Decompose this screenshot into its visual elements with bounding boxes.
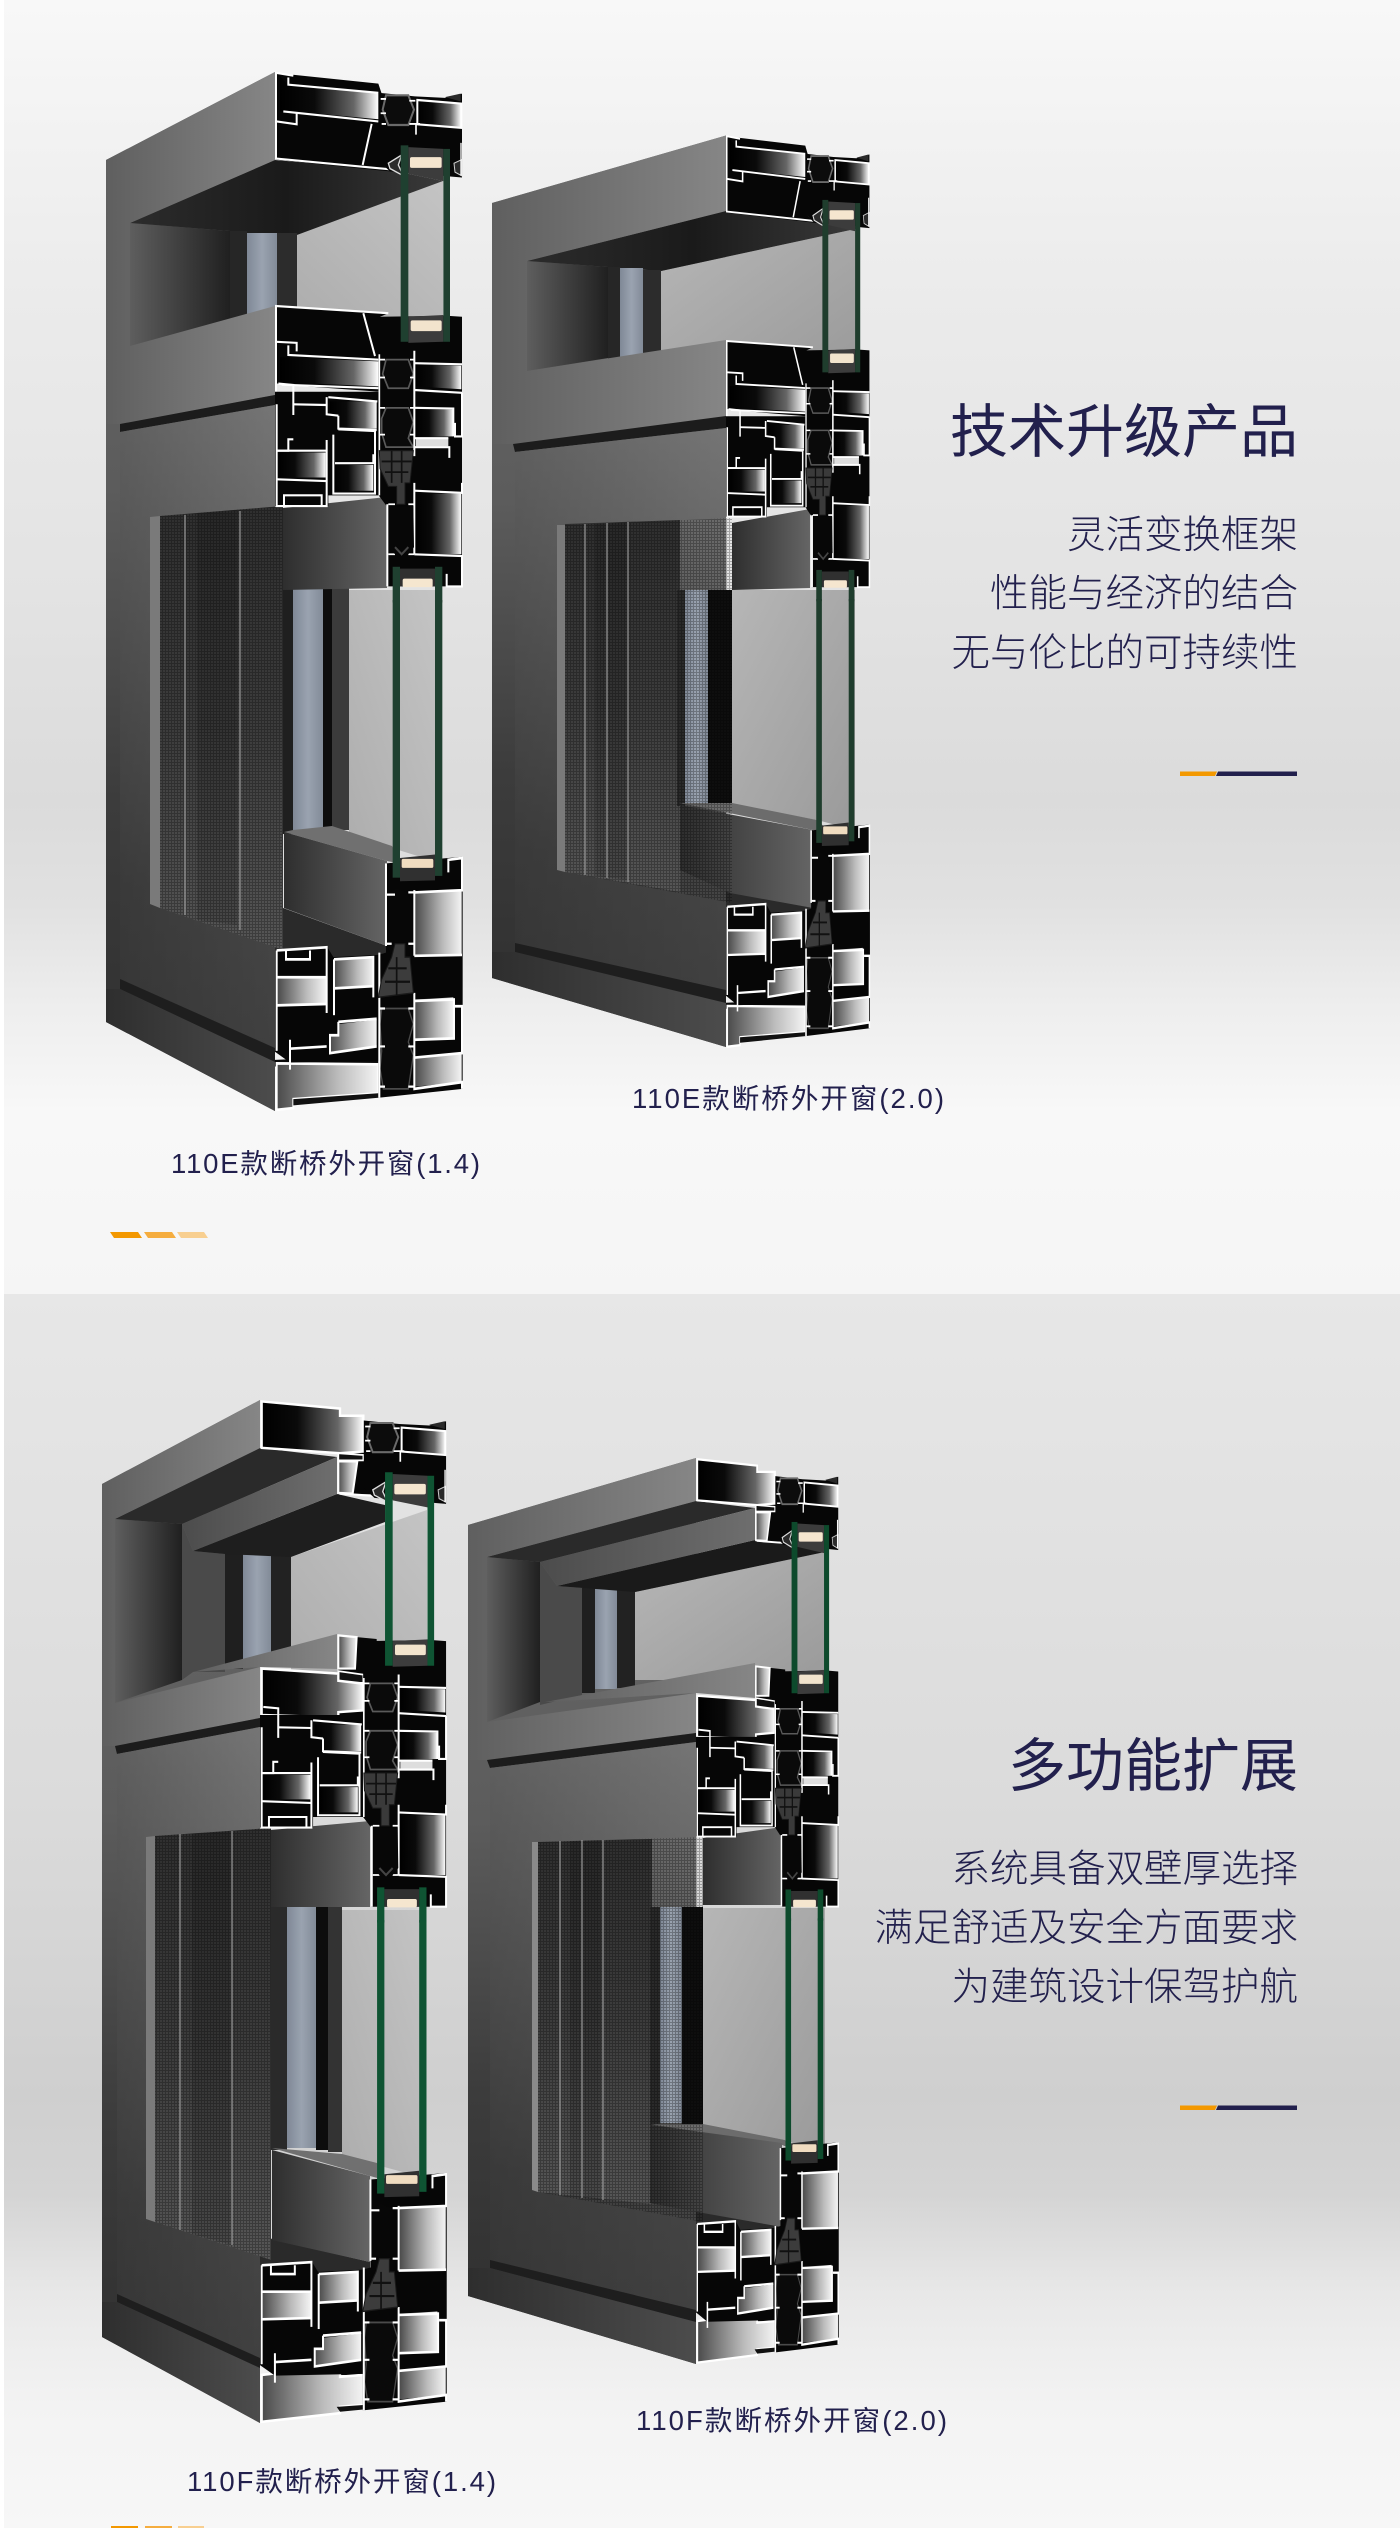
section: F profile [696,1459,839,2363]
glass panes [393,145,450,881]
screen mesh [532,1837,703,2222]
heading: technology upgrade: 技术升级产品 [950,400,1298,465]
upper opening [527,211,860,371]
text block: multifunction features: 满足舒适及安全方面要求 [874,1907,1298,1950]
screen mesh [557,518,732,903]
decorative tabs: top [110,1232,208,1238]
glass panes [377,1472,434,2197]
text block: technology upgrade features: 灵活变换框架 [1067,514,1298,557]
face bands [492,136,726,444]
accent rule: top [1180,772,1297,776]
lower opening [260,1821,425,2290]
caption: 110E 1.4: 110E款断桥外开窗(1.4) [171,1148,480,1179]
glass panes [816,200,860,846]
text block: multifunction features: 为建筑设计保驾护航 [951,1966,1298,2009]
screen mesh [146,1828,271,2260]
panel: top background [4,0,1400,1294]
accent rule: bottom [1180,2106,1297,2110]
face bands [468,1458,696,1760]
window model: 110F 2.0 [468,1458,839,2364]
window model: 110F 1.4 [102,1400,447,2423]
text block: multifunction features [874,1848,1298,2009]
text block: technology upgrade features: 无与伦比的可持续性 [951,632,1298,675]
face bands [106,72,275,424]
panel: bottom background [4,1294,1400,2528]
screen mesh [150,506,283,950]
upper opening [487,1501,825,1722]
section: F profile [260,1401,447,2422]
text block: technology upgrade features [951,514,1298,675]
lower opening [565,509,855,930]
lower opening [538,1827,825,2255]
window model: 110E 2.0 [492,136,870,1047]
decorative tabs: bottom [111,2526,204,2528]
section: E profile [275,73,463,1110]
window model: 110E 1.4 [106,72,463,1111]
upper opening [115,1448,427,1703]
lower opening [275,497,437,970]
text block: technology upgrade features: 性能与经济的结合 [990,572,1298,616]
upper opening [130,160,443,346]
text block: multifunction features: 系统具备双壁厚选择 [951,1848,1298,1891]
heading: multifunction expansion: 多功能扩展 [1008,1734,1298,1799]
caption: 110F 2.0: 110F款断桥外开窗(2.0) [636,2405,947,2436]
caption: 110F 1.4: 110F款断桥外开窗(1.4) [187,2466,496,2497]
face bands [102,1400,260,1746]
glass panes [785,1522,829,2164]
section: E profile [726,136,870,1047]
caption: 110E 2.0: 110E款断桥外开窗(2.0) [632,1083,944,1114]
